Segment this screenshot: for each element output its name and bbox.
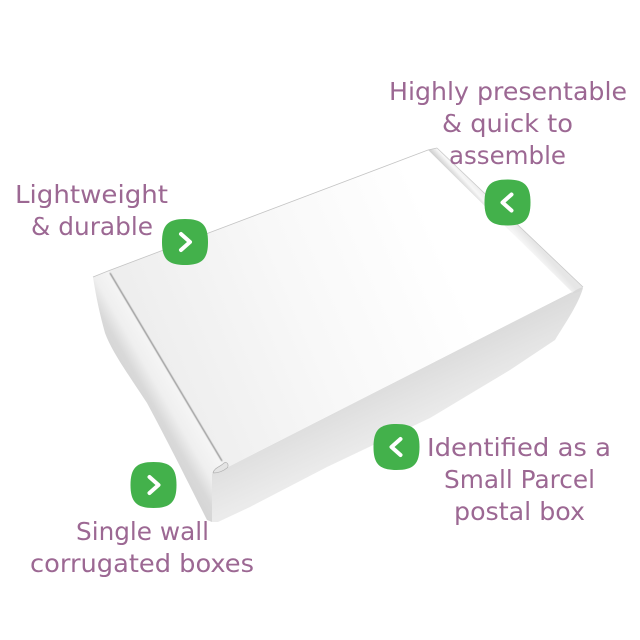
- callout: highly presentable: & quick to: [442, 109, 573, 138]
- left flap crease shadow: [110, 273, 222, 461]
- back flap: [428, 148, 583, 293]
- callout: small parcel: postal box: [454, 497, 585, 526]
- callout text: Single wall: [76, 517, 209, 546]
- icon: right chevron button top left: [162, 219, 208, 265]
- callout: highly presentable: assemble: [449, 141, 566, 170]
- flap outer edge: [437, 148, 583, 287]
- callout: lightweight: [15, 180, 168, 241]
- icon: left chevron button bottom right: [374, 424, 420, 470]
- callout: small parcel: [427, 433, 611, 526]
- rolled corner tab: [213, 463, 228, 473]
- lid back edge: [93, 148, 437, 277]
- callout: lightweight: & durable: [31, 212, 153, 241]
- callout: highly presentable: [389, 77, 627, 170]
- callout: single wall: [30, 517, 254, 578]
- callout: single wall: corrugated boxes: [30, 549, 254, 578]
- callout text: Highly presentable: [389, 77, 627, 106]
- callout text: Identified as a: [427, 433, 611, 462]
- box front side: [212, 288, 583, 522]
- icon: right chevron button bottom left: [130, 462, 176, 508]
- callout text: Lightweight: [15, 180, 168, 209]
- icon: left chevron button top right: [484, 180, 530, 226]
- front seam: [211, 474, 213, 522]
- right rolled corner tab: [572, 287, 583, 293]
- box left side: [93, 271, 228, 522]
- box lid: [108, 150, 572, 467]
- product: white mailer box: [93, 148, 583, 522]
- callout: small parcel: Small Parcel: [444, 465, 595, 494]
